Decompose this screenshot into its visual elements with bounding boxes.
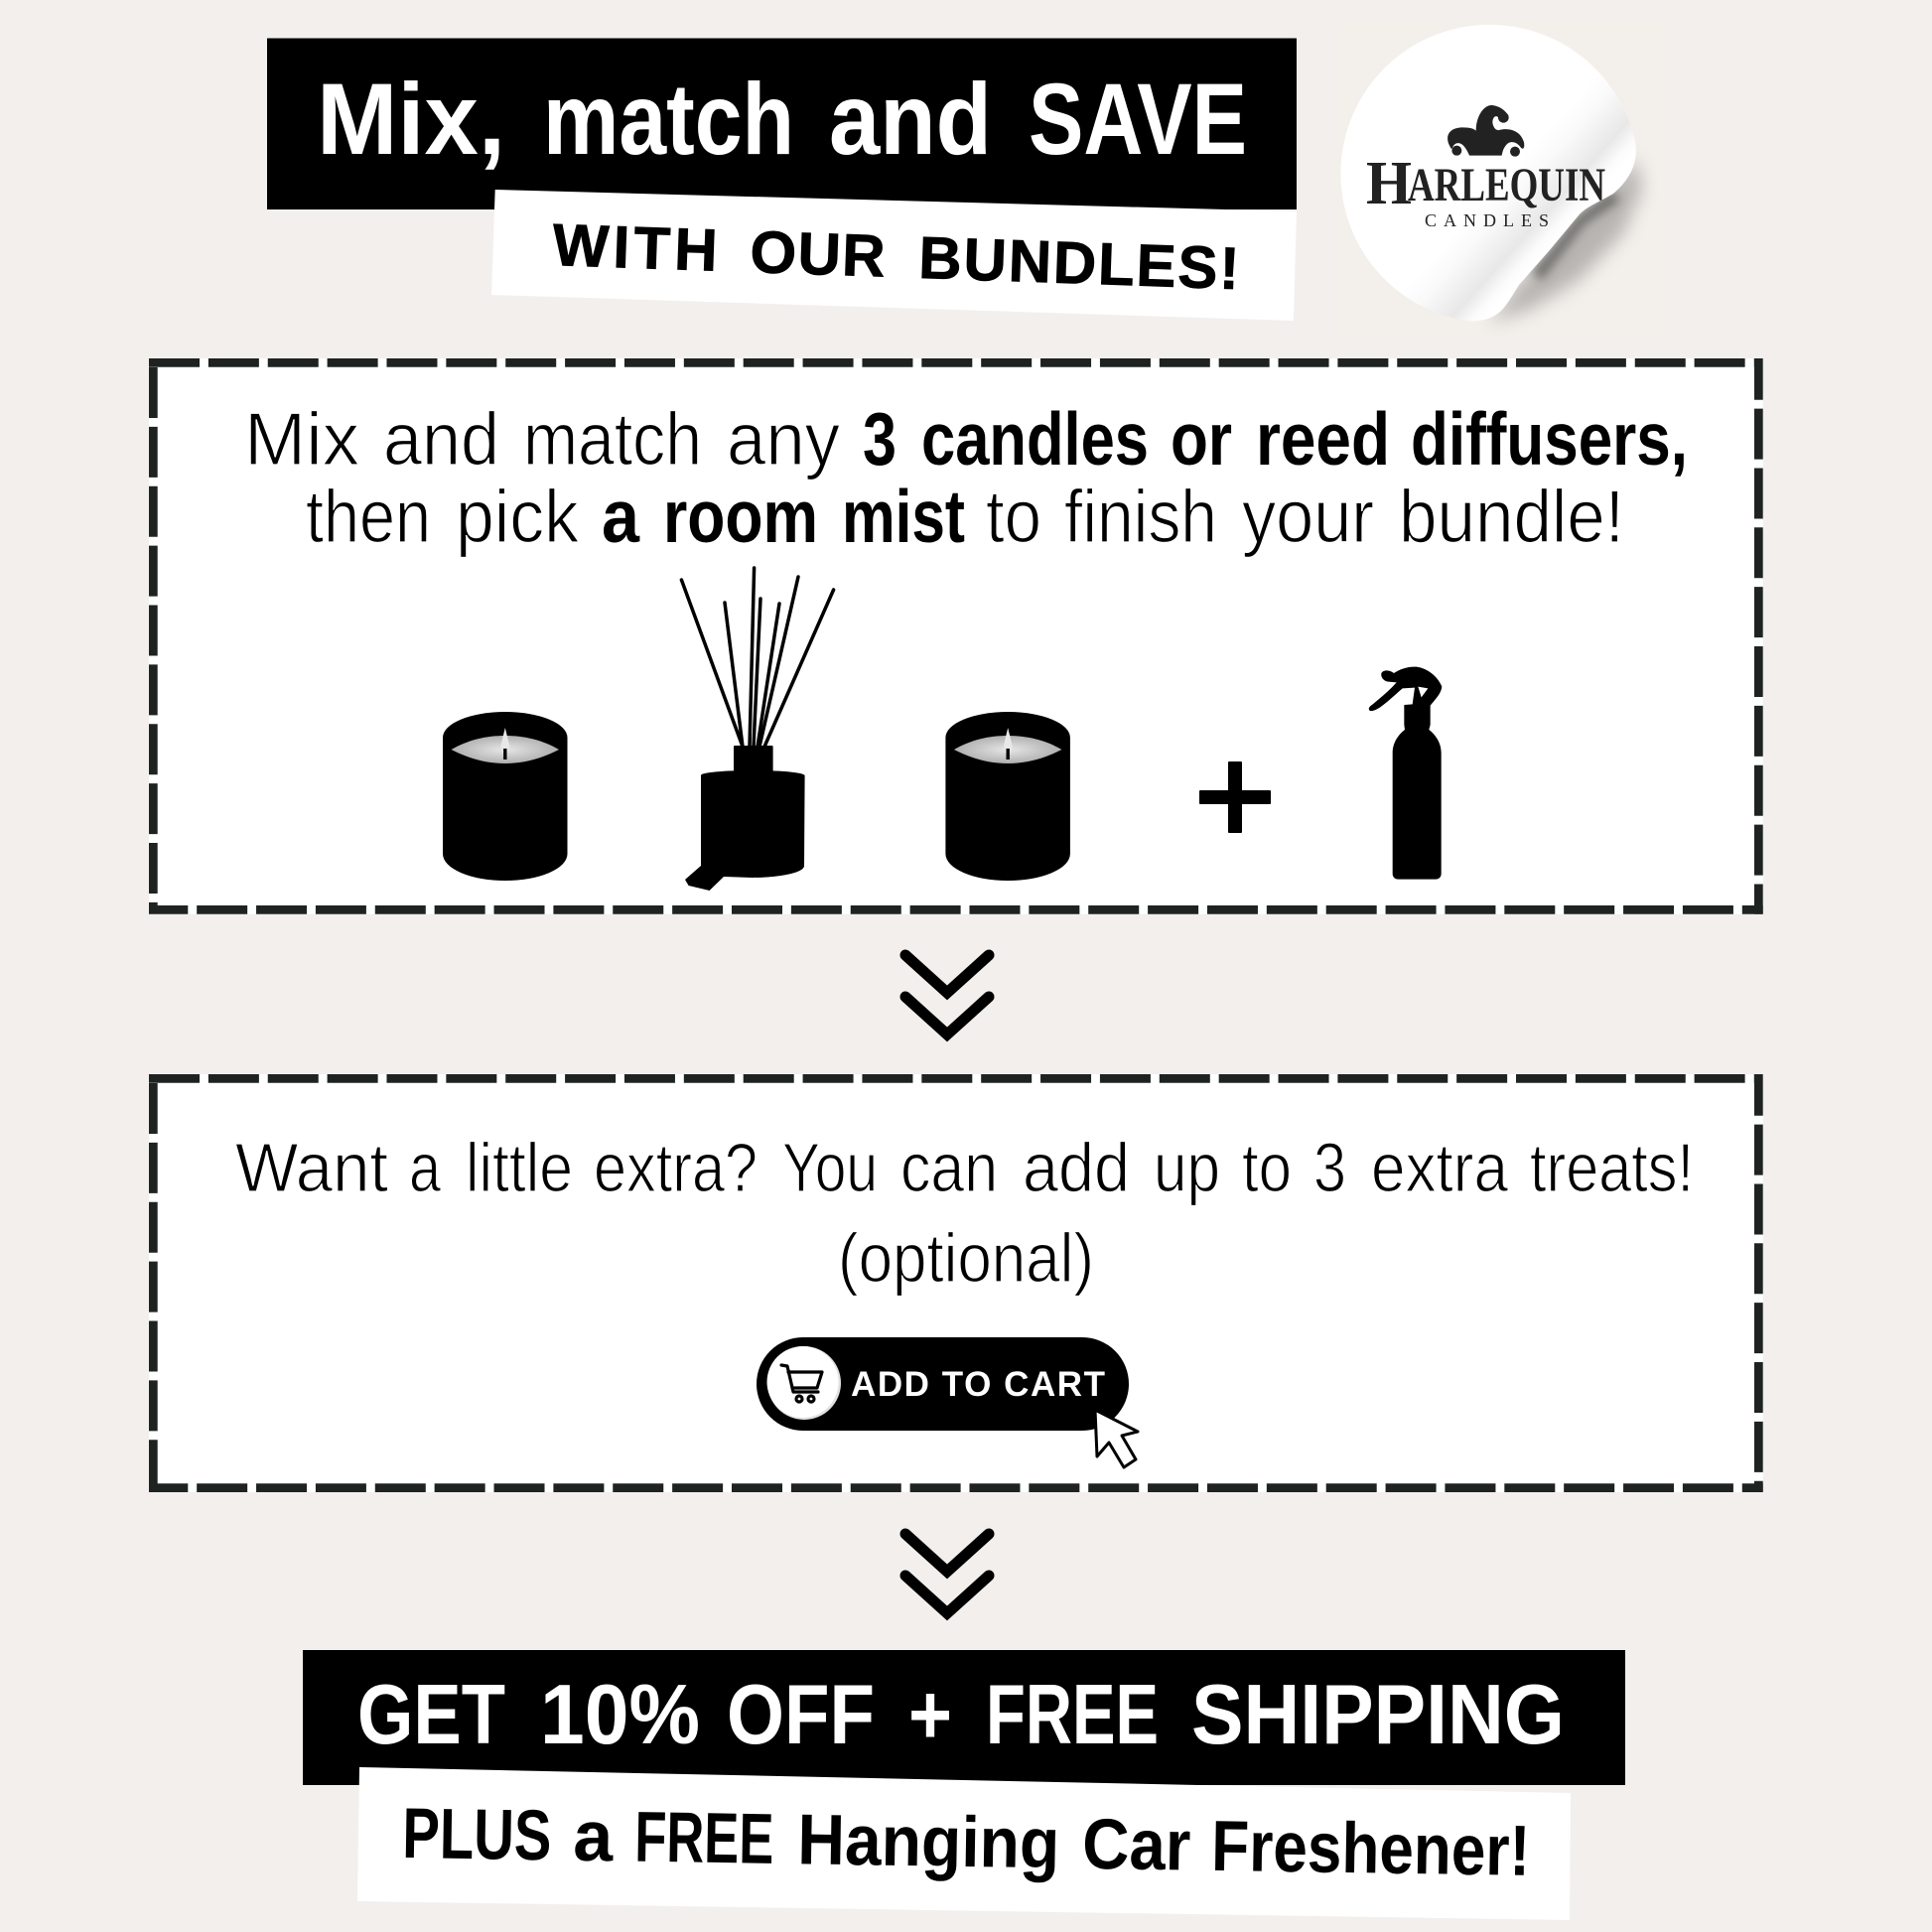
extras text: Want — [235, 1129, 388, 1206]
extras text: to — [1242, 1129, 1292, 1206]
instruction text: bundle! — [1399, 475, 1624, 558]
icon: pointer cursor — [1095, 1410, 1138, 1467]
extras text: treats! — [1530, 1129, 1694, 1206]
add to cart button — [757, 1337, 1138, 1467]
instruction text: a — [602, 475, 640, 558]
optional text: (optional) — [838, 1219, 1094, 1297]
offer banner: 10% — [540, 1668, 700, 1762]
instruction text: any — [727, 397, 840, 481]
instruction text: match — [523, 397, 702, 481]
free car freshener banner — [357, 1767, 1571, 1920]
instruction text: and — [383, 397, 499, 481]
logo wordmark: ARLEQUIN — [1408, 159, 1605, 211]
instruction text: finish — [1064, 475, 1217, 558]
extras text: You — [782, 1129, 878, 1206]
offer banner: FREE — [986, 1668, 1159, 1762]
subtitle banner: BUNDLES! — [917, 224, 1240, 302]
logo wordmark: H — [1366, 150, 1412, 217]
free car freshener banner: Car — [1082, 1805, 1191, 1885]
panel: optional extras — [149, 1074, 1763, 1492]
instruction text: then — [306, 475, 431, 558]
offer banner: GET — [357, 1668, 505, 1762]
offer banner: OFF — [727, 1668, 875, 1762]
extras text — [235, 1129, 1694, 1206]
subtitle banner: WITH — [552, 211, 719, 284]
instruction text: Mix — [244, 397, 359, 481]
instruction text: reed — [1256, 397, 1390, 481]
icon: shopping cart — [781, 1365, 822, 1402]
subtitle banner — [491, 190, 1297, 321]
free car freshener banner: a — [573, 1797, 615, 1876]
icon: candle — [443, 712, 568, 881]
title banner: Mix, — [317, 63, 505, 176]
extras text: up — [1154, 1129, 1220, 1206]
title banner: match — [543, 63, 794, 176]
panel: mix and match — [149, 358, 1763, 914]
arrow: double chevron — [905, 955, 989, 1035]
instruction text — [244, 397, 1688, 558]
subtitle banner: OUR — [749, 218, 887, 290]
instruction text: pick — [456, 475, 579, 558]
offer banner: + — [908, 1668, 952, 1762]
instruction text: mist — [842, 475, 965, 558]
title banner: and — [829, 63, 992, 176]
instruction text: diffusers, — [1411, 397, 1688, 481]
logo wordmark: CANDLES — [1425, 210, 1549, 230]
extras text: extra — [1371, 1129, 1508, 1206]
extras text: 3 — [1313, 1129, 1346, 1206]
instruction text: room — [663, 475, 818, 558]
free car freshener banner: Hanging — [797, 1800, 1060, 1883]
icon: reed diffuser — [681, 568, 834, 891]
logo mark — [1448, 105, 1524, 157]
instruction text: candles — [921, 397, 1149, 481]
logo wordmark — [1366, 150, 1605, 230]
instruction text: 3 — [863, 397, 897, 481]
add to cart button: ADD TO CART — [851, 1365, 1105, 1404]
title banner — [267, 38, 1297, 209]
offer banner: SHIPPING — [1191, 1668, 1565, 1762]
arrow: double chevron — [905, 1534, 989, 1613]
extras text: add — [1023, 1129, 1130, 1206]
free car freshener banner: PLUS — [402, 1794, 552, 1875]
free car freshener banner: FREE — [634, 1798, 774, 1879]
free car freshener banner: Freshener! — [1211, 1807, 1531, 1891]
extras text: a — [409, 1129, 441, 1206]
offer banner — [303, 1650, 1625, 1785]
instruction text: to — [986, 475, 1041, 558]
instruction text: your — [1242, 475, 1374, 558]
icon: candle — [945, 712, 1070, 881]
title banner: SAVE — [1029, 63, 1247, 176]
logo sticker — [1336, 22, 1665, 338]
extras text: extra? — [594, 1129, 758, 1206]
extras text: can — [900, 1129, 998, 1206]
extras text: little — [466, 1129, 573, 1206]
icon: room mist spray bottle — [1369, 667, 1442, 880]
instruction text: or — [1171, 397, 1232, 481]
icon: plus — [1199, 761, 1271, 833]
